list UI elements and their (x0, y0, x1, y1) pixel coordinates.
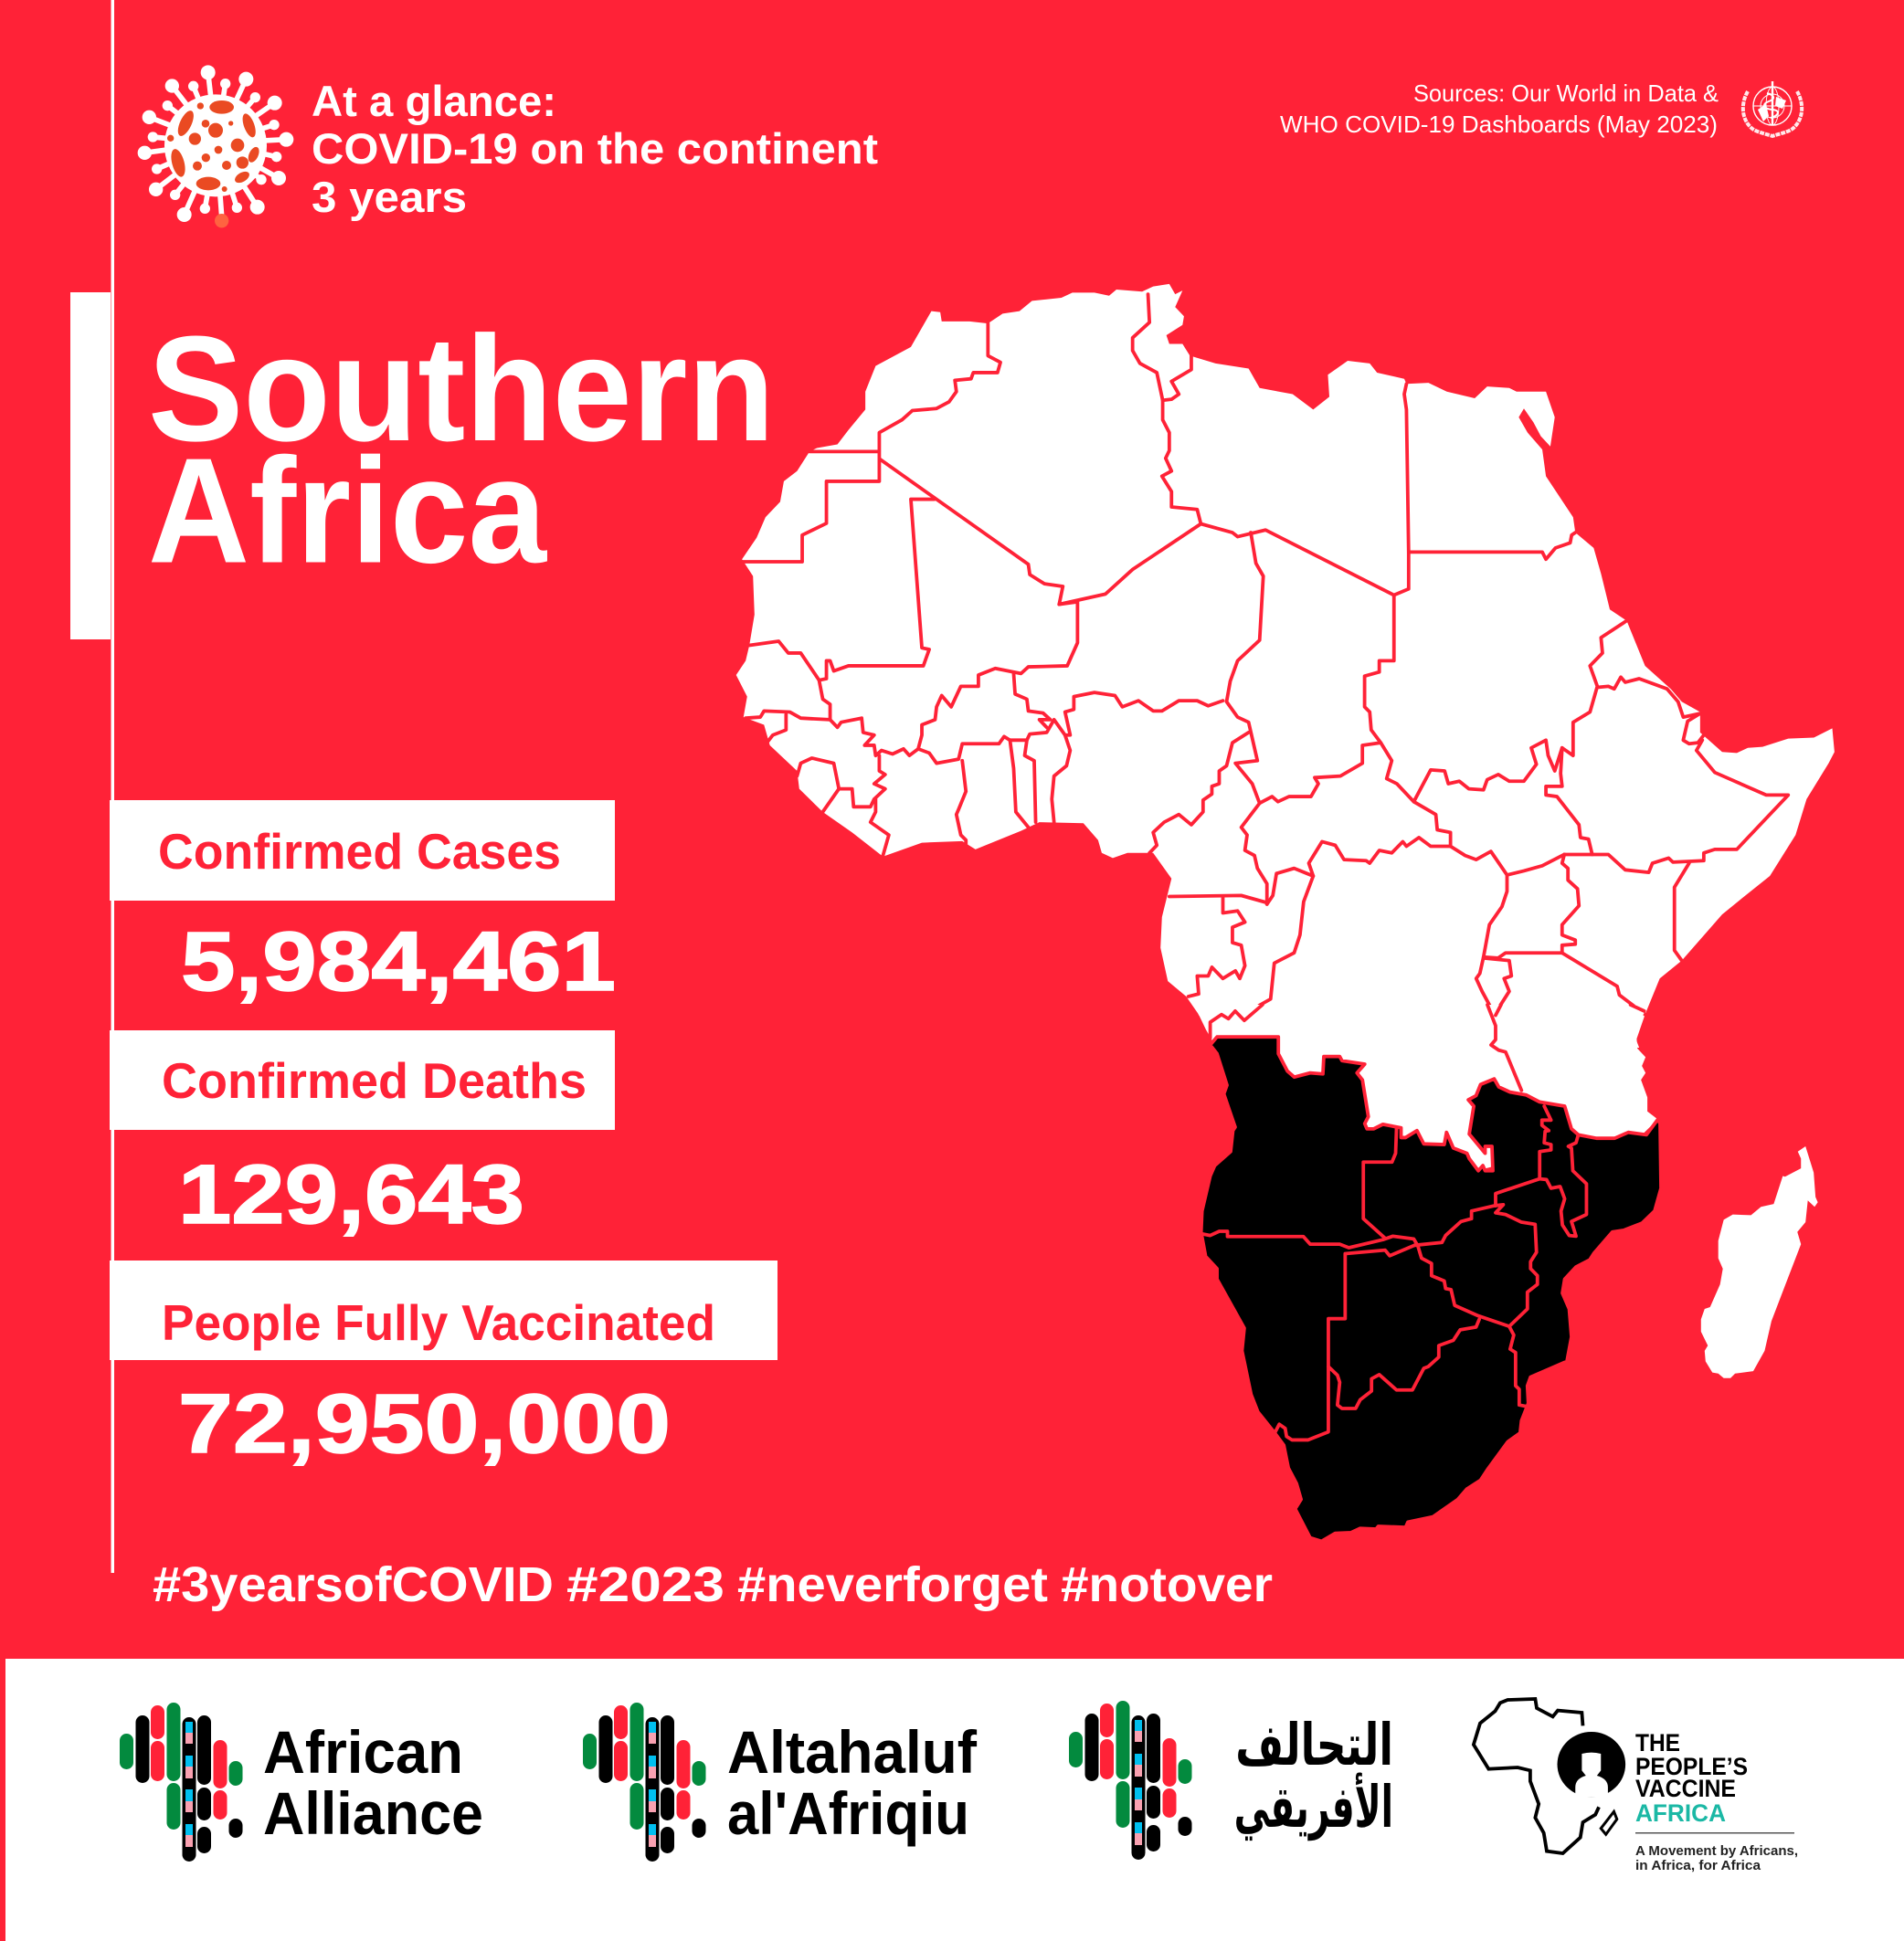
logo: The People's Vaccine Africa: VACCINE (1635, 1775, 1736, 1802)
logo: The People's Vaccine Africa: PEOPLE’S (1635, 1753, 1748, 1780)
sources: WHO COVID-19 Dashboards (May 2023) (1280, 111, 1718, 138)
logo: African Alliance: Alliance (263, 1779, 483, 1847)
logo: Arabic African Alliance: الأفريقي (1234, 1771, 1393, 1841)
heading: Southern Africa (148, 305, 775, 594)
hashtags (153, 1557, 1273, 1612)
logo: The People's Vaccine Africa (1474, 1699, 1798, 1873)
stat: confirmed deaths (110, 1030, 615, 1241)
logo: Altahaluf al'Afriqiu: al'Afriqiu (727, 1779, 969, 1847)
logo: The People's Vaccine Africa: THE (1635, 1729, 1680, 1756)
stat: confirmed cases: Confirmed Cases (158, 823, 561, 880)
heading: Southern Africa: Africa (148, 427, 548, 594)
stat: confirmed cases: 5,984,461 (181, 915, 616, 1008)
accent bar (70, 292, 111, 639)
logo: The People's Vaccine Africa: in Africa, for Africa (1635, 1858, 1761, 1873)
logo: African Alliance (120, 1703, 483, 1862)
map: Madagascar (1701, 1146, 1818, 1378)
logo: Altahaluf al'Afriqiu (583, 1703, 978, 1862)
footer panel (5, 1659, 1904, 1941)
header title: At a glance: (312, 77, 556, 125)
header title: COVID-19 on the continent (312, 124, 878, 173)
hashtags: #notover (1061, 1557, 1273, 1612)
header title: 3 years (312, 173, 467, 221)
stat: people fully vaccinated: People Fully Vaccinated (162, 1294, 715, 1351)
map: northern and central countries (736, 284, 1835, 1058)
sources: Sources: Our World in Data & (1413, 79, 1719, 107)
logo: Arabic African Alliance: التحالف (1235, 1712, 1393, 1778)
hashtags: #2023 (566, 1557, 725, 1612)
logo: Arabic African Alliance (1069, 1701, 1393, 1860)
map: southern Africa highlighted (1194, 1005, 1661, 1541)
heading: Southern Africa: Southern (148, 305, 775, 472)
stat: people fully vaccinated (110, 1261, 777, 1471)
hashtags: #neverforget (737, 1557, 1048, 1612)
sources (1280, 79, 1719, 138)
icon: coronavirus (138, 65, 293, 227)
logo: Altahaluf al'Afriqiu: Altahaluf (727, 1718, 978, 1786)
header title (312, 77, 878, 221)
icon: WHO emblem (1743, 81, 1802, 136)
stat: people fully vaccinated: 72,950,000 (178, 1377, 671, 1471)
logo: African Alliance: African (263, 1718, 463, 1786)
hashtags: #3yearsofCOVID (153, 1557, 554, 1612)
logo: The People's Vaccine Africa: A Movement by Africans, (1635, 1843, 1798, 1859)
map of Africa (736, 284, 1835, 1541)
stat: confirmed deaths: Confirmed Deaths (162, 1052, 587, 1109)
stat: confirmed deaths: 129,643 (178, 1148, 524, 1241)
logo: The People's Vaccine Africa: AFRICA (1635, 1799, 1726, 1827)
stat: confirmed cases (110, 800, 616, 1008)
